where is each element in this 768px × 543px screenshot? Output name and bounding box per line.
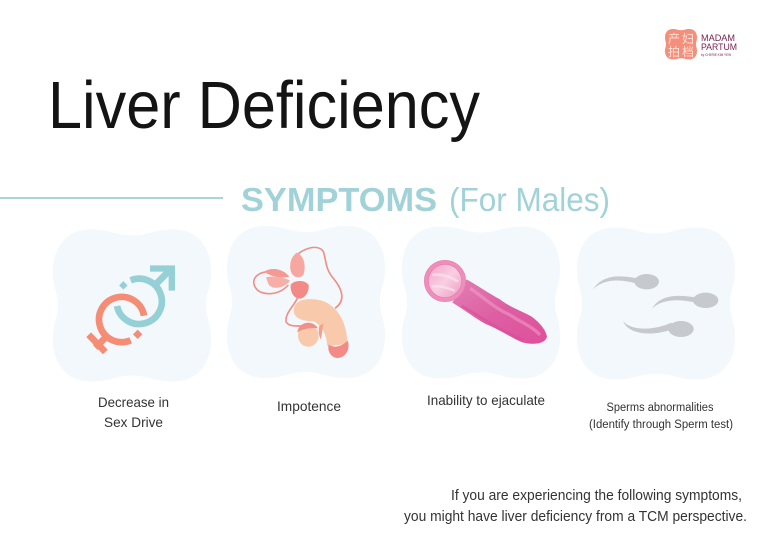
icon: condom: [424, 260, 547, 344]
logo wordmark: PARTUM: [701, 41, 737, 52]
logo wordmark: [701, 32, 737, 57]
icon: sperm cells: [593, 274, 718, 337]
footer note: If you are experiencing the following symptoms,: [451, 488, 742, 504]
footer note: [404, 488, 747, 525]
label: Decrease in: [98, 394, 169, 410]
label: Sperms abnormalities: [606, 402, 714, 414]
logo badge: 产妇: [668, 32, 694, 46]
logo wordmark: by CHERIE KIM YEW: [701, 53, 732, 57]
icon: gender symbols: [89, 265, 175, 352]
title: Liver Deficiency: [48, 68, 480, 143]
panel: decrease in sex drive: [53, 230, 211, 430]
logo badge: [665, 29, 697, 59]
label: Inability to ejaculate: [427, 392, 545, 408]
panel: inability to ejaculate: [402, 226, 560, 408]
logo wordmark: MADAM: [701, 32, 735, 43]
footer note: you might have liver deficiency from a TCM perspective.: [404, 509, 747, 525]
label: (Identify through Sperm test): [589, 419, 733, 431]
label: [98, 394, 169, 430]
label: Impotence: [277, 398, 341, 414]
heading: symptoms: SYMPTOMS: [241, 181, 437, 218]
heading rule: [0, 197, 223, 199]
heading: symptoms: (For Males): [449, 181, 610, 218]
panel background: [227, 226, 385, 378]
panel background: [577, 228, 735, 380]
logo: [665, 29, 737, 59]
logo badge: 拍档: [668, 44, 694, 59]
icon: male anatomy: [254, 247, 349, 358]
panel: sperm abnormalities: [577, 228, 735, 431]
label: Sex Drive: [104, 414, 163, 430]
panel: impotence: [227, 226, 385, 414]
panel background: [53, 230, 211, 382]
label: [589, 402, 733, 431]
heading: symptoms: [241, 181, 610, 218]
panel background: [402, 226, 560, 378]
